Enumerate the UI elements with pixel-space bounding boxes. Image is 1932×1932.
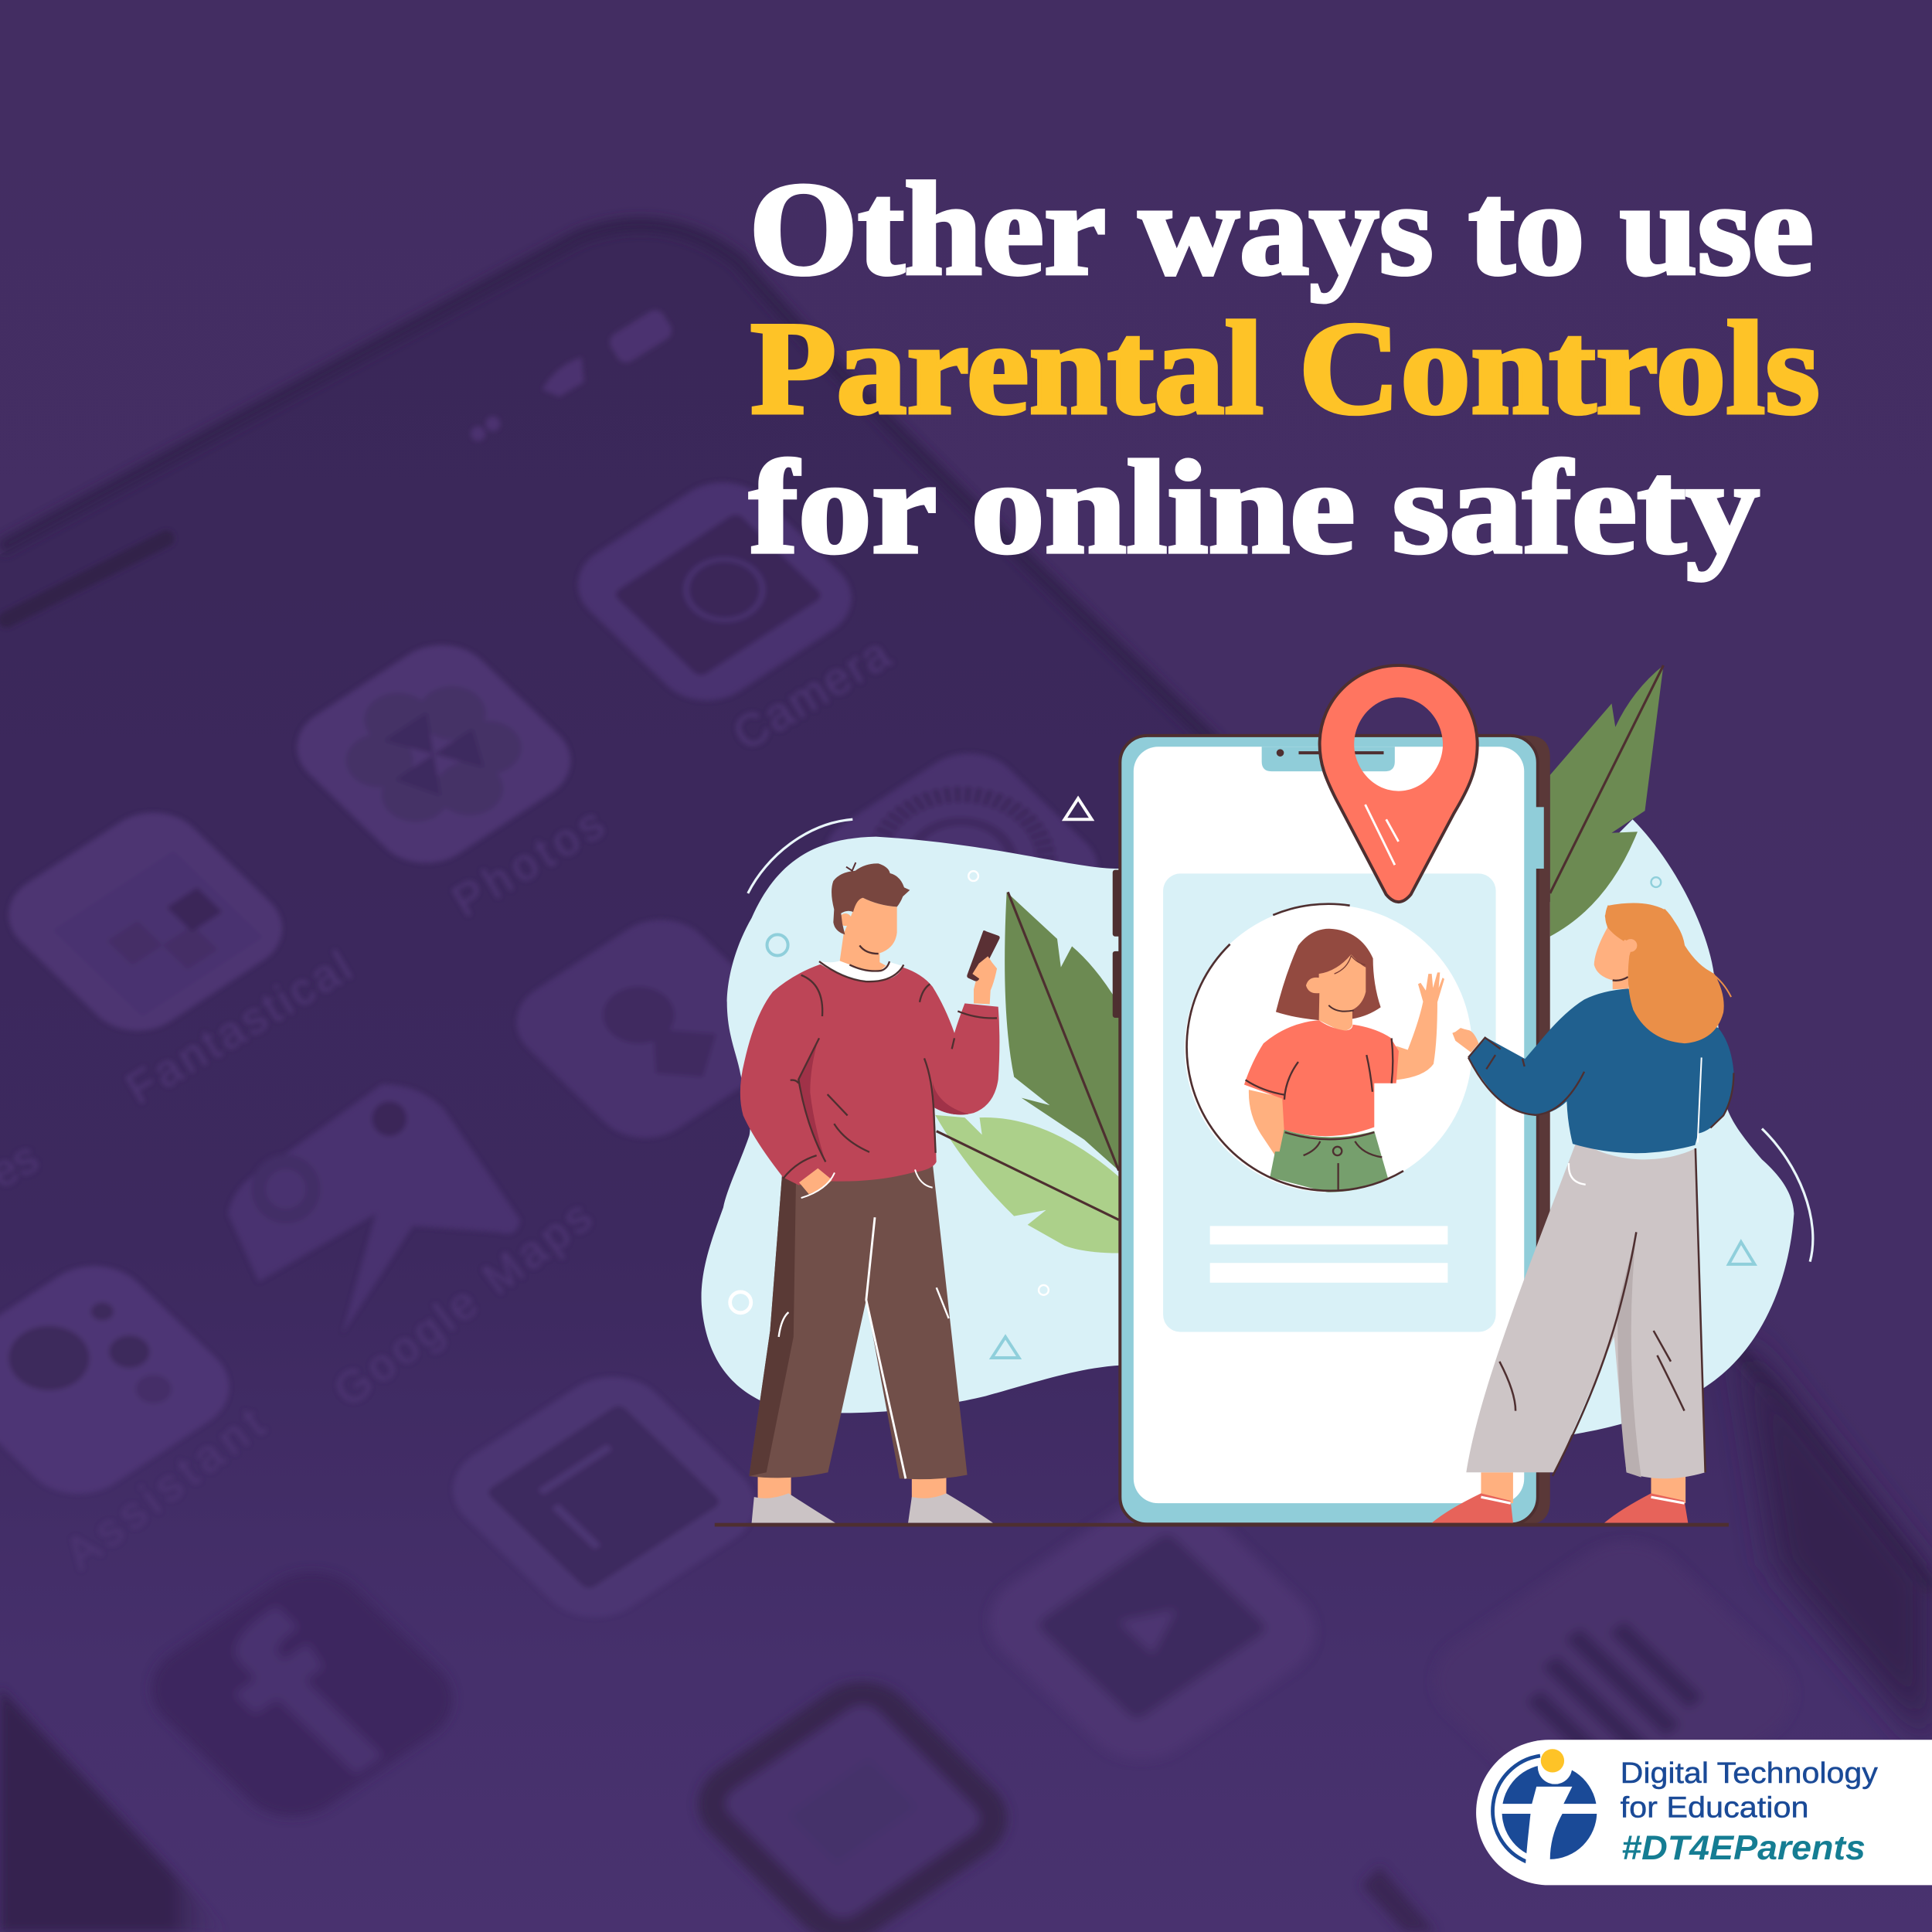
logo text line 2: for Education — [1621, 1791, 1809, 1825]
background: blurred phone photo: Fantastical — [117, 941, 359, 1114]
profile picture: waving girl — [1185, 904, 1472, 1196]
leaves — [935, 665, 1663, 1253]
profile card — [1163, 873, 1496, 1332]
logo text: Digital Technology — [1621, 1757, 1879, 1790]
title line 3: for online safety — [749, 434, 1760, 581]
logo badge — [1476, 1740, 1932, 1885]
title line 1: Other ways to use — [749, 156, 1814, 303]
illustration: people, phone and location pin — [702, 665, 1813, 1526]
text placeholder bars — [1210, 1226, 1447, 1283]
decorative shapes — [730, 798, 1754, 1358]
logo mark: i in blue circle — [1493, 1749, 1602, 1866]
background: blurred phone photo: Camera — [724, 628, 899, 760]
hashtag: #DT4EParents — [1621, 1829, 1866, 1867]
woman waving — [1432, 903, 1733, 1523]
phone — [1113, 736, 1550, 1524]
woman's upper body — [1452, 903, 1733, 1185]
man's upper body — [740, 862, 1000, 1198]
background: blurred phone photo: Photos — [444, 798, 612, 927]
location pin — [1320, 665, 1478, 902]
title line 2: highlighted: Parental Controls — [750, 295, 1820, 442]
background blob — [702, 819, 1794, 1439]
ground line — [715, 1523, 1729, 1526]
background: blurred phone photo: Assistant — [56, 1399, 273, 1579]
title — [749, 156, 1820, 581]
man with phone — [740, 862, 1000, 1523]
background: blurred phone photo: Google Maps — [325, 1192, 600, 1417]
decorative arcs — [748, 819, 1813, 1262]
